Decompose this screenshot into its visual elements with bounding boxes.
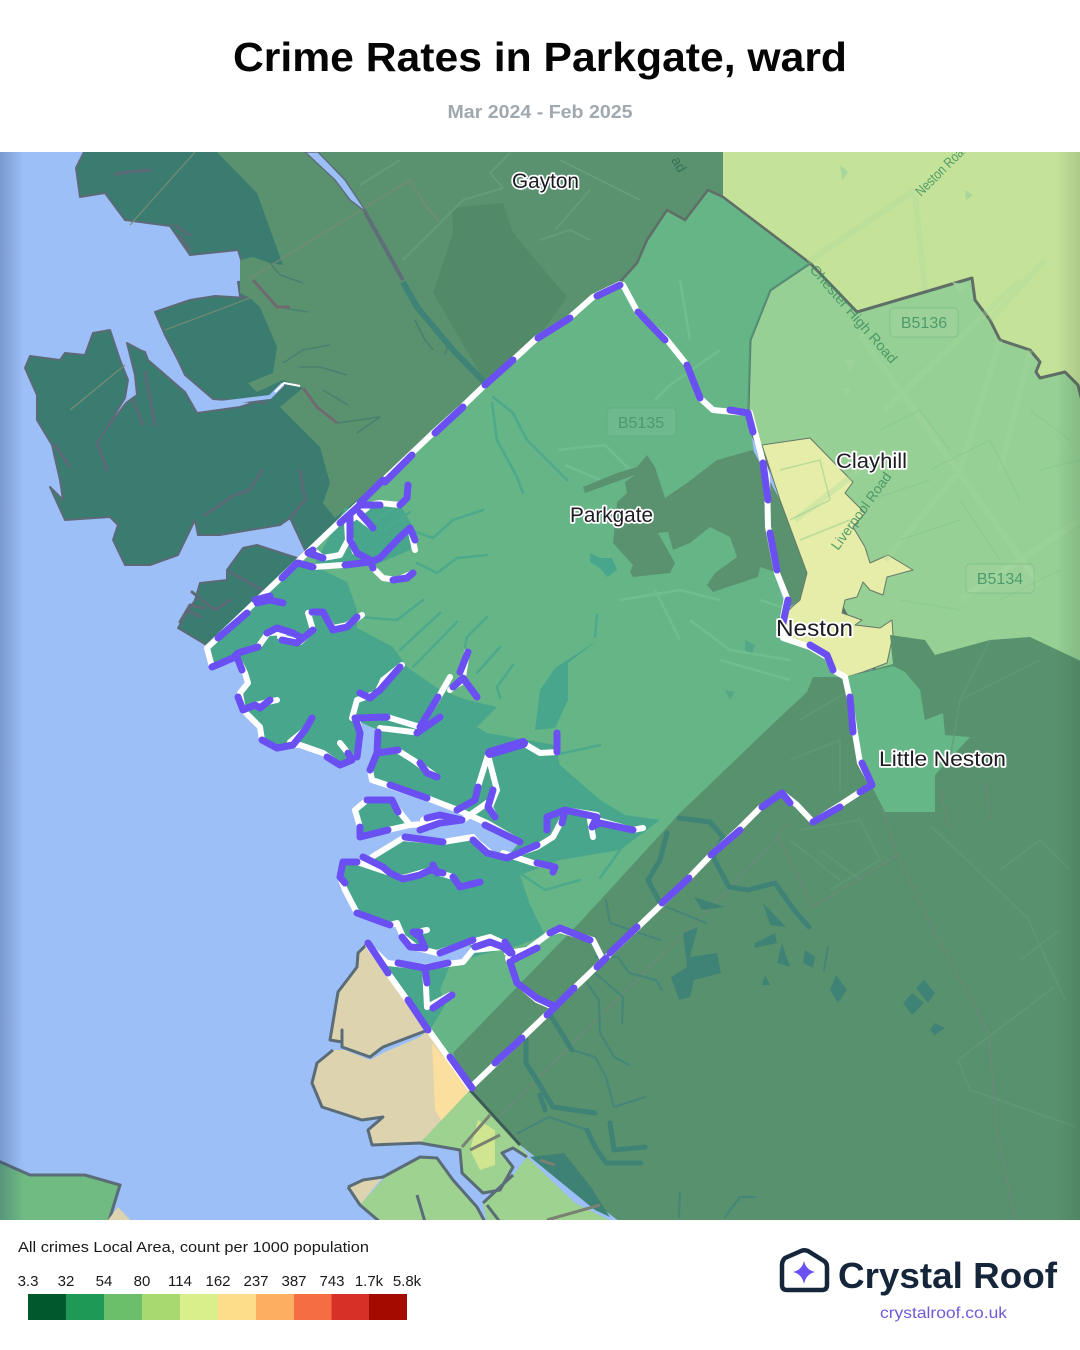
- map edge vignette: [0, 152, 1080, 1220]
- legend values: 237: [243, 1273, 269, 1290]
- icon: house with sparkle: [782, 1250, 827, 1290]
- legend title: All crimes Local Area, count per 1000 population: [18, 1239, 369, 1256]
- road badge: B5136: B5136: [901, 315, 947, 332]
- water inlet north: [220, 384, 283, 403]
- panel: ward base green: [303, 192, 839, 1060]
- panel: dark green block in ward: [583, 450, 807, 607]
- wordmark: Crystal Roof: [838, 1255, 1058, 1296]
- south east road grid: [950, 640, 990, 756]
- panel: inland dark green north: [215, 150, 723, 518]
- legend values: 80: [134, 1273, 150, 1290]
- panel: south green island: [420, 1090, 530, 1193]
- legend values: 54: [96, 1273, 112, 1290]
- faint roads north: [360, 153, 640, 260]
- boundary white line: [207, 284, 872, 1088]
- neighbourhood roads east: [794, 188, 1046, 562]
- legend values: 387: [281, 1273, 307, 1290]
- panel: top right yellow-green area: [723, 152, 1080, 386]
- boundary purple segments: marsh creeks: [212, 485, 633, 1008]
- road label: Liverpool Road: Liverpool Road: [827, 469, 895, 553]
- place label: Little Neston: Little Neston: [879, 748, 1006, 771]
- panel: tan area south lower: [314, 1032, 448, 1144]
- legend values: 1.7k: [355, 1273, 384, 1290]
- legend values: 5.8k: [393, 1273, 422, 1290]
- river and channel north: [305, 152, 367, 213]
- ponds east: [840, 165, 973, 285]
- pond: [590, 553, 617, 577]
- subtitle: Mar 2024 - Feb 2025: [448, 101, 632, 122]
- logo: [782, 1250, 1058, 1322]
- panel: east green area: [748, 263, 1080, 680]
- estuary teal inlet: [535, 640, 598, 730]
- panel: south green land: [360, 1157, 613, 1222]
- legend values: 743: [319, 1273, 345, 1290]
- panel: mudflat islands south west: [177, 544, 298, 646]
- ward boundary: white dashed purple: [207, 284, 872, 1088]
- legend values: 32: [58, 1273, 74, 1290]
- place label: Neston: Neston: [776, 615, 853, 641]
- triangle saltmarsh island: [358, 804, 405, 832]
- road badge: B5134: [966, 564, 1034, 593]
- road badge: B5134: B5134: [977, 571, 1023, 588]
- legend values: [18, 1273, 422, 1290]
- place label: Parkgate: Parkgate: [570, 504, 653, 527]
- boundary purple segments: outer line: [218, 285, 872, 1088]
- legend values: 114: [168, 1273, 192, 1290]
- panel: ward teal saltmarsh: [207, 559, 660, 1030]
- road label: Neston Road: Neston Road: [912, 140, 971, 199]
- marsh creeks south east: [518, 900, 828, 1217]
- small tan island: [350, 1178, 382, 1204]
- teal sliver south: [530, 1153, 610, 1217]
- darker woodland north: [435, 204, 566, 369]
- panel: mudflats north of ward: [24, 152, 365, 566]
- place label: Clayhill: Clayhill: [836, 450, 907, 473]
- panel: tan area south: [332, 947, 424, 1056]
- yellow patch: [432, 1043, 470, 1123]
- ward tidal creeks: [360, 397, 620, 890]
- road badge: B5135: [607, 408, 676, 436]
- panel: Neston yellow area: [762, 438, 913, 677]
- title: Crime Rates in Parkgate, ward: [233, 34, 847, 80]
- panel: dark green south east: [453, 635, 1080, 1222]
- legend values: 162: [205, 1273, 231, 1290]
- ward town roads: [558, 280, 790, 680]
- place label: Gayton: Gayton: [512, 170, 579, 193]
- marsh pools: [671, 897, 945, 1035]
- road badge: B5135: B5135: [618, 415, 664, 432]
- road badge: B5136: [890, 308, 958, 337]
- road label: partial: ad: [668, 154, 690, 175]
- creeks north: [270, 263, 448, 433]
- legend values: 3.3: [18, 1273, 38, 1290]
- panel: south west corner land: [0, 1160, 120, 1224]
- panel: Little Neston green: [845, 666, 970, 812]
- water: [0, 152, 873, 1220]
- south outlines: [312, 943, 527, 1222]
- teal north marsh: [313, 505, 415, 567]
- road label: Chester High Road: Chester High Road: [807, 261, 901, 366]
- legend: [18, 1239, 422, 1320]
- mudflat creek lines: [55, 170, 305, 622]
- website: crystalroof.co.uk: [880, 1305, 1008, 1322]
- legend colour scale: [28, 1294, 407, 1320]
